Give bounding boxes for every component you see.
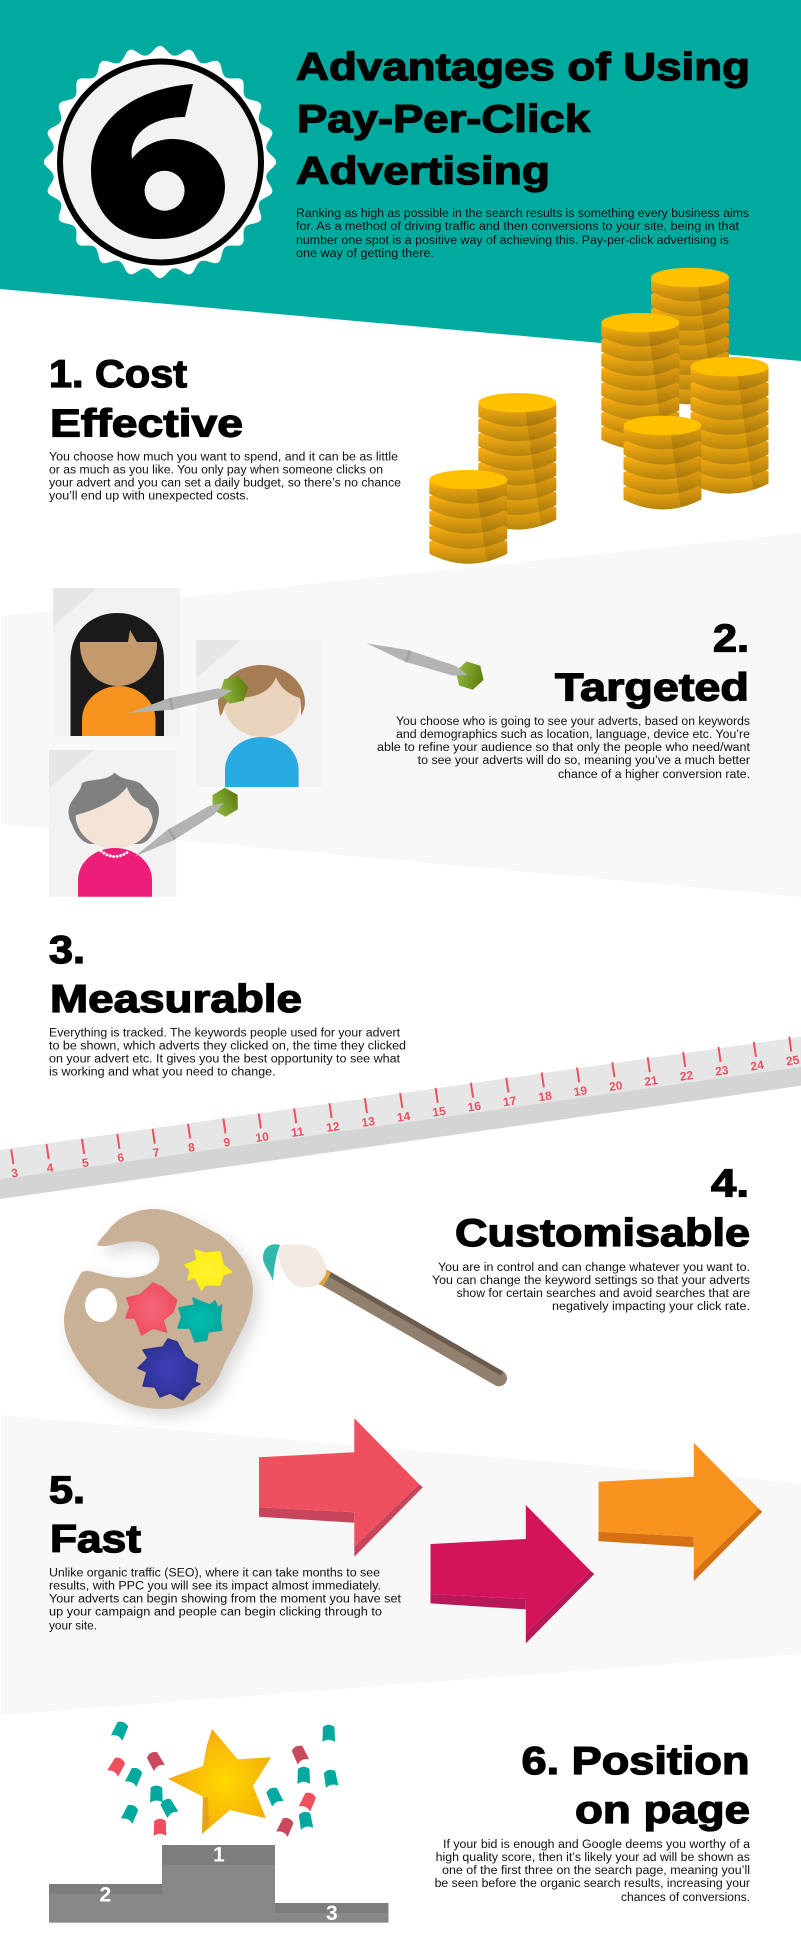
heading: 5. Fast: Fast [50, 1518, 141, 1561]
heading: 1. Cost Effective: 1. Cost [49, 353, 187, 396]
text: section 2: to see your adverts will do so, meaning you’ve a much better [418, 755, 750, 767]
heading: 6. Position on page [522, 1740, 750, 1832]
podium: 1 [213, 1844, 225, 1867]
paint blob: yellow [185, 1250, 232, 1290]
text: section 4 [432, 1262, 750, 1313]
ruler: 18 [538, 1088, 553, 1104]
ruler: 8 [187, 1140, 196, 1155]
dart: free flying [363, 631, 487, 692]
intro text: number one spot is a positive way of achieving this. Pay-per-click advertising is [296, 235, 729, 247]
text: section 6: chances of conversions. [621, 1892, 750, 1904]
dart: hitting man [126, 674, 251, 725]
title: Pay-Per-Click [297, 98, 590, 141]
title: Advertising [296, 150, 550, 193]
ruler: 13 [361, 1114, 376, 1130]
text: section 5 [49, 1568, 402, 1633]
badge: number 6 [44, 46, 276, 278]
text: section 4: negatively impacting your click rate. [552, 1301, 750, 1313]
text: section 3: on your advert etc. It gives you the best opportunity to see what [49, 1054, 401, 1066]
text: section 5: Unlike organic traffic (SEO), where it can take months to see [49, 1568, 380, 1580]
title: Advantages of Using [296, 46, 750, 89]
coin stacks [429, 268, 770, 575]
heading: 6. Position on page: 6. Position [522, 1740, 750, 1783]
ruler: 11 [290, 1124, 305, 1140]
text: section 4: show for certain searches and avoid searches that are [456, 1288, 750, 1300]
heading: 6. Position on page: on page [575, 1789, 750, 1832]
text: section 2 [377, 716, 751, 781]
portrait card: man with brown hair [196, 640, 323, 787]
podium [49, 1844, 388, 1925]
ruler: 7 [152, 1145, 161, 1160]
arrow: crimson [430, 1505, 594, 1643]
portrait card: older woman with grey hair [49, 750, 176, 897]
light band behind section 2 [1, 533, 801, 897]
paint brush [263, 1244, 502, 1378]
heading: 4. Customisable: Customisable [455, 1212, 750, 1255]
star [168, 1729, 271, 1834]
heading: 5. Fast: 5. [49, 1469, 85, 1512]
ruler: 12 [325, 1119, 341, 1135]
ruler: 5 [81, 1155, 90, 1170]
ruler: 19 [573, 1083, 588, 1099]
heading: 4. Customisable [455, 1162, 750, 1255]
text: section 1: or as much as you like. You only pay when someone clicks on [49, 464, 383, 476]
text: section 2: You choose who is going to see your adverts, based on keywords [396, 716, 750, 728]
ruler: 20 [608, 1078, 624, 1094]
text: section 1: your advert and you can set a daily budget, so there’s no chance [49, 478, 401, 490]
ruler: 23 [714, 1063, 730, 1079]
paint blob: red [126, 1283, 177, 1335]
heading: 3. Measurable: Measurable [50, 978, 302, 1021]
podium: 3 [326, 1902, 338, 1925]
portrait card: woman with black hair [53, 588, 180, 736]
heading: 1. Cost Effective [49, 353, 243, 446]
intro text [296, 208, 749, 260]
intro text: Ranking as high as possible in the search results is something every business aims [296, 208, 749, 220]
ruler: 6 [116, 1150, 125, 1165]
heading: 3. Measurable [49, 929, 302, 1021]
podium: 2 [99, 1884, 111, 1907]
text: section 1: You choose how much you want to spend, and it can be as little [49, 452, 398, 464]
heading: 2. Targeted: 2. [713, 618, 749, 660]
text: section 5: your site. [49, 1621, 97, 1633]
text: section 2: chance of a higher conversion rate. [558, 769, 750, 781]
paint blob: blue [138, 1339, 200, 1400]
ruler: 4 [46, 1160, 55, 1175]
text: section 6: one of the first three on the search page, meaning you’ll [442, 1865, 750, 1877]
text: section 6: If your bid is enough and Google deems you worthy of a [443, 1839, 751, 1851]
arrow: coral [259, 1418, 423, 1557]
text: section 3 [49, 1028, 406, 1079]
intro text: for. As a method of driving traffic and then conversions to your site, being in that [296, 221, 740, 233]
ruler: 16 [467, 1099, 482, 1114]
title [296, 46, 750, 193]
light band behind section 5 [1, 1415, 801, 1715]
heading: 2. Targeted [555, 618, 749, 710]
ruler: 21 [643, 1073, 659, 1089]
arrow: orange [598, 1443, 762, 1581]
header teal background [0, 0, 801, 361]
heading: 3. Measurable: 3. [49, 929, 85, 972]
heading: 4. Customisable: 4. [711, 1162, 749, 1206]
text: section 6: be seen before the organic search results, increasing your [435, 1878, 750, 1890]
ruler: 9 [223, 1135, 231, 1150]
confetti [107, 1720, 338, 1837]
intro text: one way of getting there. [296, 248, 434, 260]
text: section 5: results, with PPC you will see its impact almost immediately. [49, 1581, 381, 1593]
ruler [0, 1036, 801, 1199]
ruler: 25 [785, 1053, 801, 1068]
text: section 1: you’ll end up with unexpected costs. [49, 490, 249, 502]
text: section 6 [435, 1839, 751, 1904]
ruler: 15 [431, 1104, 447, 1120]
text: section 4: You can change the keyword settings so that your adverts [432, 1275, 750, 1287]
paint blob: teal [178, 1298, 222, 1342]
ruler: 24 [750, 1058, 765, 1074]
ruler: 17 [502, 1094, 518, 1109]
ruler: 14 [396, 1109, 412, 1125]
ruler: 3 [10, 1166, 19, 1180]
text: section 1 [49, 452, 401, 502]
ruler: 22 [679, 1068, 694, 1084]
paint palette [64, 1209, 253, 1409]
heading: 5. Fast [49, 1469, 141, 1561]
text: section 5: Your adverts can begin showing from the moment you have set [49, 1594, 402, 1606]
text: section 4: You are in control and can change whatever you want to. [438, 1262, 750, 1274]
text: section 2: able to refine your audience so that only the people who need/want [377, 742, 751, 754]
text: section 6: high quality score, then it’s likely your ad will be shown as [436, 1852, 750, 1864]
ruler: 10 [255, 1129, 270, 1145]
heading: 2. Targeted: Targeted [555, 666, 749, 710]
text: section 3: is working and what you need to change. [49, 1067, 276, 1079]
text: section 2: and demographics such as location, language, device etc. You’re [396, 729, 750, 741]
text: section 5: up your campaign and people can begin clicking through to [49, 1607, 382, 1619]
dart: hitting older woman [128, 784, 244, 868]
text: section 3: Everything is tracked. The keywords people used for your advert [49, 1028, 401, 1040]
heading: 1. Cost Effective: Effective [50, 402, 243, 446]
text: section 3: to be shown, which adverts they clicked on, the time they clicked [49, 1041, 406, 1053]
